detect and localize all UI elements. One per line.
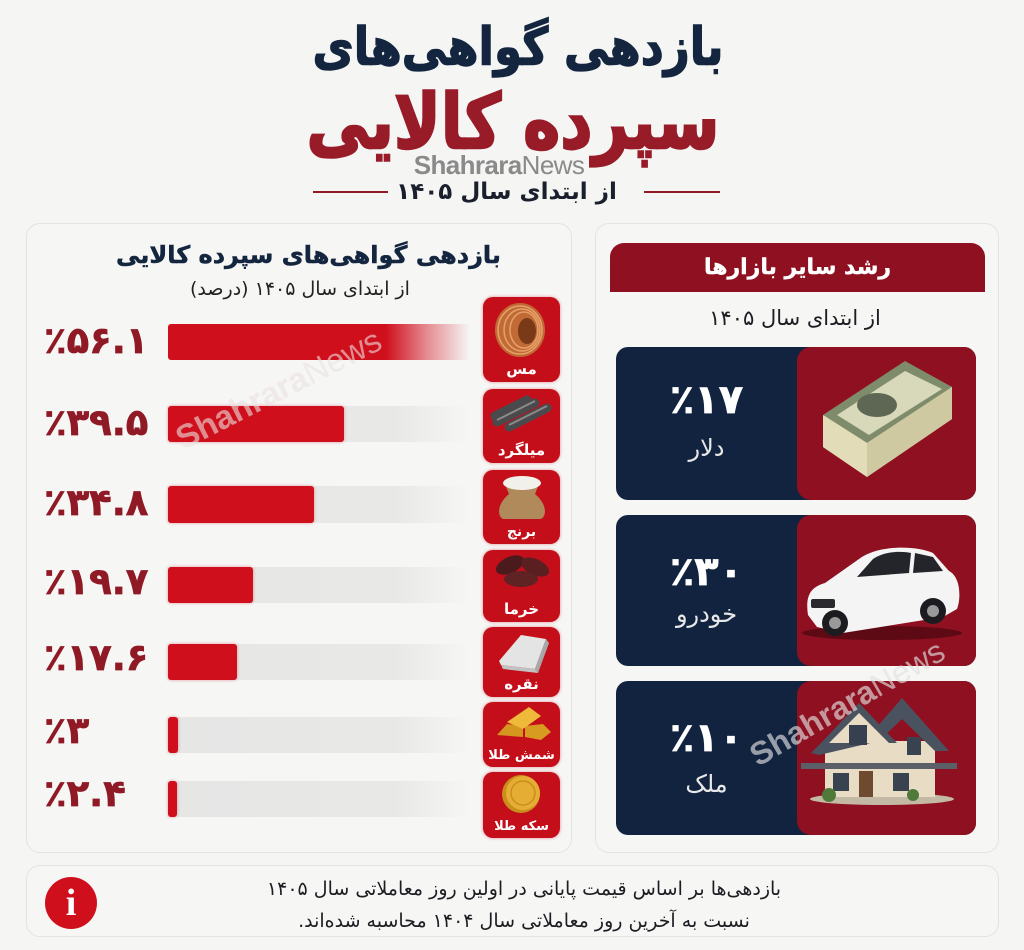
panel: commodity certificate returns — [26, 223, 572, 853]
icon: info: i — [66, 882, 76, 924]
bar row: rebar value: ٪۳۹.۵ — [44, 401, 148, 444]
card: property: ملک — [685, 770, 728, 798]
tile: rice — [483, 470, 560, 544]
bar: date — [168, 567, 470, 603]
bar: silver — [168, 644, 470, 680]
tile: date: خرما — [504, 600, 539, 618]
card: property — [616, 681, 976, 835]
title: line two: سپرده کالایی — [307, 79, 719, 166]
tile: date — [483, 550, 560, 622]
bar row: rice value: ٪۳۴.۸ — [44, 481, 148, 524]
tile: silver — [483, 627, 560, 697]
icon: info — [45, 877, 97, 929]
tile: copper — [483, 297, 560, 382]
tile: rebar — [483, 389, 560, 463]
panel: other markets growth — [595, 223, 999, 853]
bar: copper — [168, 324, 466, 360]
watermark: left: ShahraraNews — [169, 321, 387, 457]
footer text: بازدهی‌ها بر اساس قیمت پایانی در اولین روز معاملاتی سال ۱۴۰۵ — [267, 878, 781, 900]
card: property: ٪۱۰ — [670, 715, 743, 761]
panel subheading: از ابتدای سال ۱۴۰۵ — [709, 306, 881, 330]
bar row: date value: ٪۱۹.۷ — [44, 560, 148, 603]
bar: rice — [168, 486, 470, 523]
tile: rice: برنج — [507, 524, 536, 540]
logo: ShahraraNews: ShahraraNews — [414, 150, 584, 180]
bar: gold coin — [168, 781, 470, 817]
footer text: نسبت به آخرین روز معاملاتی سال ۱۴۰۴ محاسبه شده‌اند. — [298, 910, 750, 932]
card: car: خودرو — [676, 600, 737, 628]
bar row: silver value: ٪۱۷.۶ — [44, 636, 148, 679]
bar: gold bar — [168, 717, 470, 753]
footer note panel — [26, 865, 999, 937]
panel header band — [610, 243, 985, 292]
bar: rebar — [168, 406, 470, 442]
tile: gold bar — [483, 702, 560, 767]
card: car: ٪۳۰ — [670, 549, 743, 595]
title: line one: بازدهی گواهی‌های — [312, 16, 724, 77]
card: car — [616, 515, 976, 666]
tile: copper: مس — [506, 360, 537, 378]
tile: gold coin — [483, 772, 560, 838]
tile: silver: نقره — [504, 675, 539, 693]
watermark: right: ShahraraNews — [743, 633, 951, 773]
card: dollar: دلار — [689, 434, 724, 462]
subtitle with rules: از ابتدای سال ۱۴۰۵ — [396, 179, 617, 205]
bar row: copper value: ٪۵۶.۱ — [44, 319, 148, 362]
panel subheading: از ابتدای سال ۱۴۰۵ (درصد) — [190, 278, 410, 300]
card: dollar — [616, 347, 976, 500]
card: dollar: ٪۱۷ — [670, 377, 743, 423]
bar row: gold bar value: ٪۳ — [44, 709, 89, 752]
tile: gold bar: شمش طلا — [488, 748, 555, 763]
bar row: gold coin value: ٪۲.۴ — [44, 772, 126, 815]
tile: rebar: میلگرد — [498, 441, 545, 459]
panel heading: بازدهی گواهی‌های سپرده کالایی — [116, 241, 501, 269]
footer text — [267, 878, 781, 932]
panel header band: رشد سایر بازارها — [704, 255, 891, 280]
tile: gold coin: سکه طلا — [494, 819, 549, 834]
